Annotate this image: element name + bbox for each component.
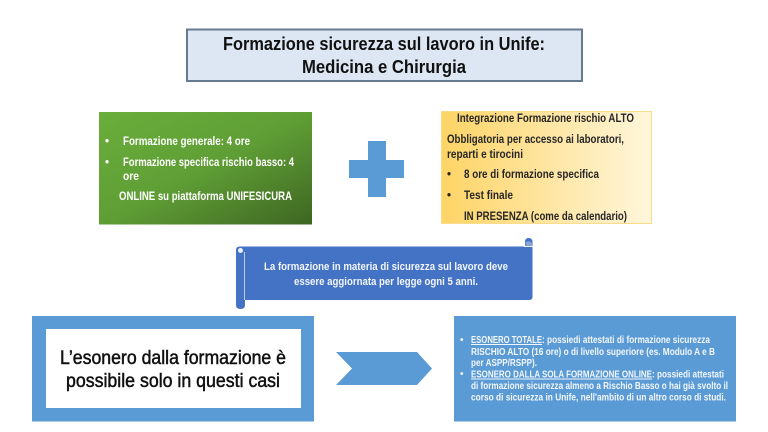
panel: exemption cases: ESONERO DALLA SOLA FORMAZIONE ONLINE xyxy=(471,370,652,380)
panel: online training: ore xyxy=(123,171,139,183)
panel: high risk training: 8 ore di formazione specifica xyxy=(464,169,600,181)
panel: exemption heading xyxy=(32,316,314,422)
panel: high risk training: Integrazione Formazione rischio ALTO xyxy=(457,113,634,125)
panel: online training: ONLINE su piattaforma UNIFESICURA xyxy=(119,191,292,203)
title xyxy=(187,30,582,81)
panel: online training: Formazione generale: 4 ore xyxy=(123,136,250,148)
callout: scroll banner: essere aggiornata per legge ogni 5 anni. xyxy=(294,276,478,288)
panel: online training xyxy=(99,112,312,224)
panel: exemption cases: • xyxy=(460,335,464,346)
panel: high risk training: reparti e tirocini xyxy=(447,149,523,161)
callout: scroll banner: La formazione in materia di sicurezza sul lavoro deve xyxy=(264,261,508,273)
panel: exemption cases: : possiedi attestati di formazione sicurezza xyxy=(542,335,710,346)
panel: high risk training: Test finale xyxy=(464,190,513,202)
panel: exemption cases: RISCHIO ALTO (16 ore) o di livello superiore (es. Modulo A e B xyxy=(471,347,715,358)
panel: exemption heading: possibile solo in questi casi xyxy=(66,370,280,392)
title: Medicina e Chirurgia xyxy=(302,57,467,77)
panel: online training: Formazione specifica rischio basso: 4 xyxy=(123,157,294,169)
panel: online training: • xyxy=(105,136,109,148)
panel: high risk training: Obbligatoria per accesso ai laboratori, xyxy=(447,134,624,146)
panel: online training: • xyxy=(105,157,109,169)
panel: exemption cases: • xyxy=(460,369,464,380)
arrow: chevron xyxy=(336,352,432,385)
panel: high risk training: • xyxy=(447,190,451,202)
panel: exemption cases: per ASPP/RSPP). xyxy=(471,358,537,369)
callout: scroll banner xyxy=(236,238,532,309)
icon: plus xyxy=(349,141,404,197)
panel: exemption cases: ESONERO TOTALE xyxy=(471,335,542,346)
panel: high risk training xyxy=(442,112,652,224)
panel: high risk training: IN PRESENZA (come da calendario) xyxy=(464,211,627,223)
panel: high risk training: • xyxy=(447,169,451,181)
panel: exemption cases: : possiedi attestati xyxy=(652,370,724,380)
title: Formazione sicurezza sul lavoro in Unife: xyxy=(223,34,545,54)
panel: exemption cases xyxy=(454,316,736,422)
panel: exemption heading: L’esonero dalla formazione è xyxy=(60,347,286,369)
